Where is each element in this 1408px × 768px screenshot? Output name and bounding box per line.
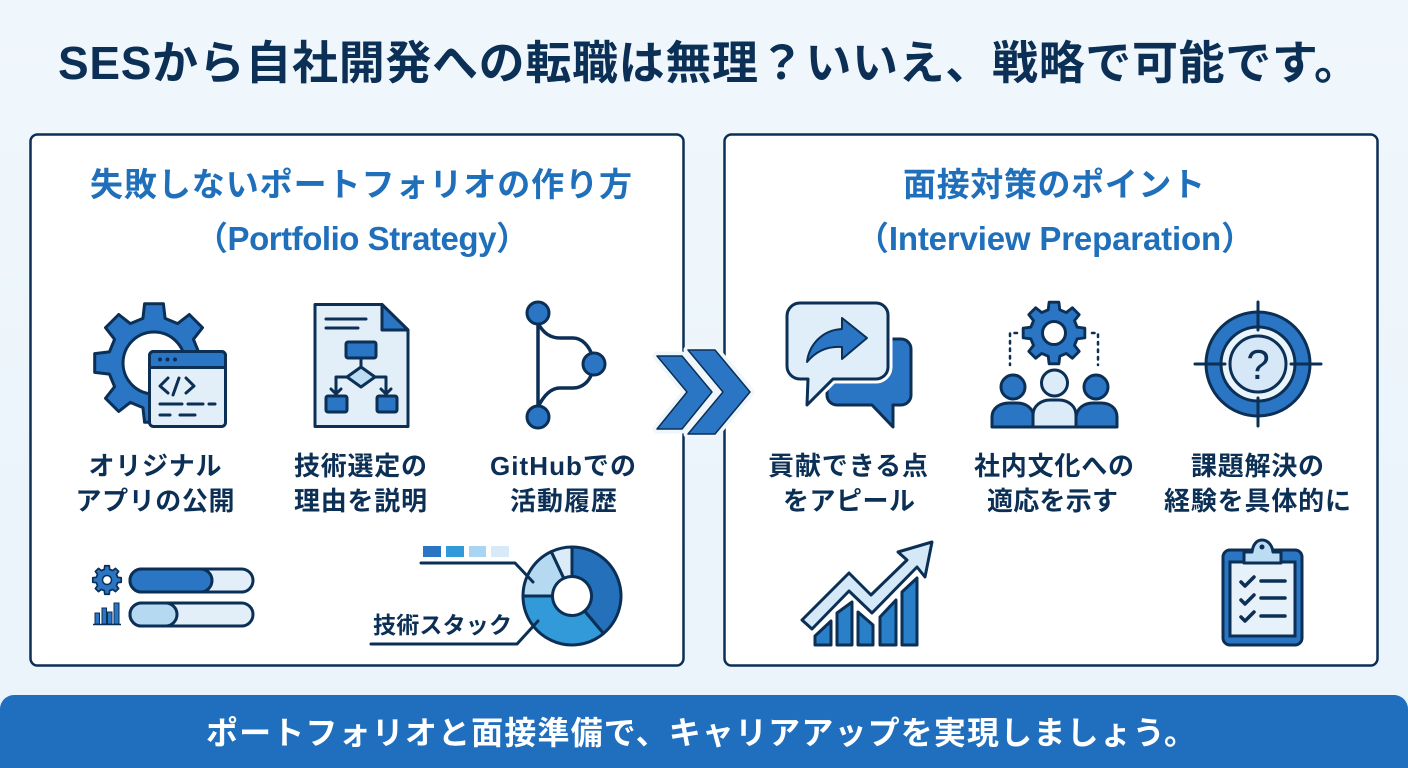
label: github activity: [490, 451, 636, 516]
label: original app: アプリの公開: [76, 486, 234, 516]
icon: document flowchart: [315, 304, 408, 426]
icon: speech bubbles: [787, 303, 911, 427]
panel: portfolio strategy: [30, 134, 684, 666]
label: contribution: [768, 451, 928, 516]
label: tech selection: [294, 451, 427, 516]
label: contribution: をアピール: [783, 486, 915, 516]
subheading: portfolio: （Portfolio Strategy）: [195, 220, 529, 257]
label: culture fit: 社内文化への: [974, 451, 1134, 481]
banner: [0, 695, 1408, 768]
label: problem solving: 経験を具体的に: [1164, 486, 1351, 516]
icon: target question: [1195, 302, 1321, 426]
heading: portfolio: 失敗しないポートフォリオの作り方: [90, 166, 632, 203]
label: original app: [76, 451, 234, 516]
icon: git branch: [527, 302, 605, 428]
legend swatches: [423, 546, 509, 557]
icon: growth chart: [802, 542, 932, 645]
label: problem solving: [1164, 451, 1351, 516]
label: github activity: 活動履歴: [510, 486, 617, 516]
icon: gear with code window: [95, 304, 226, 426]
panel: interview preparation: [724, 134, 1378, 666]
label: tech stack: 技術スタック: [373, 612, 512, 638]
banner text: ポートフォリオと面接準備で、キャリアアップを実現しましょう。: [206, 715, 1196, 751]
label: tech selection: 理由を説明: [294, 486, 427, 516]
label: contribution: 貢献できる点: [768, 451, 928, 481]
label: culture fit: [974, 451, 1134, 516]
heading: interview: 面接対策のポイント: [903, 166, 1205, 203]
icon: skill bars: [93, 566, 253, 626]
label: culture fit: 適応を示す: [987, 486, 1118, 516]
label: problem solving: 課題解決の: [1191, 451, 1324, 481]
label: original app: オリジナル: [88, 451, 222, 481]
icon: team and gear: [992, 302, 1117, 427]
icon: target question: ?: [1246, 341, 1270, 388]
subheading: interview: （Interview Preparation）: [856, 220, 1254, 257]
label: tech selection: 技術選定の: [294, 451, 427, 481]
icon: clipboard checklist: [1223, 540, 1302, 645]
title: SESから自社開発への転職は無理？いいえ、戦略で可能です。: [58, 37, 1360, 89]
chart: tech stack donut: [371, 546, 621, 645]
label: github activity: GitHubでの: [490, 451, 636, 481]
arrow: double chevron: [657, 350, 750, 434]
